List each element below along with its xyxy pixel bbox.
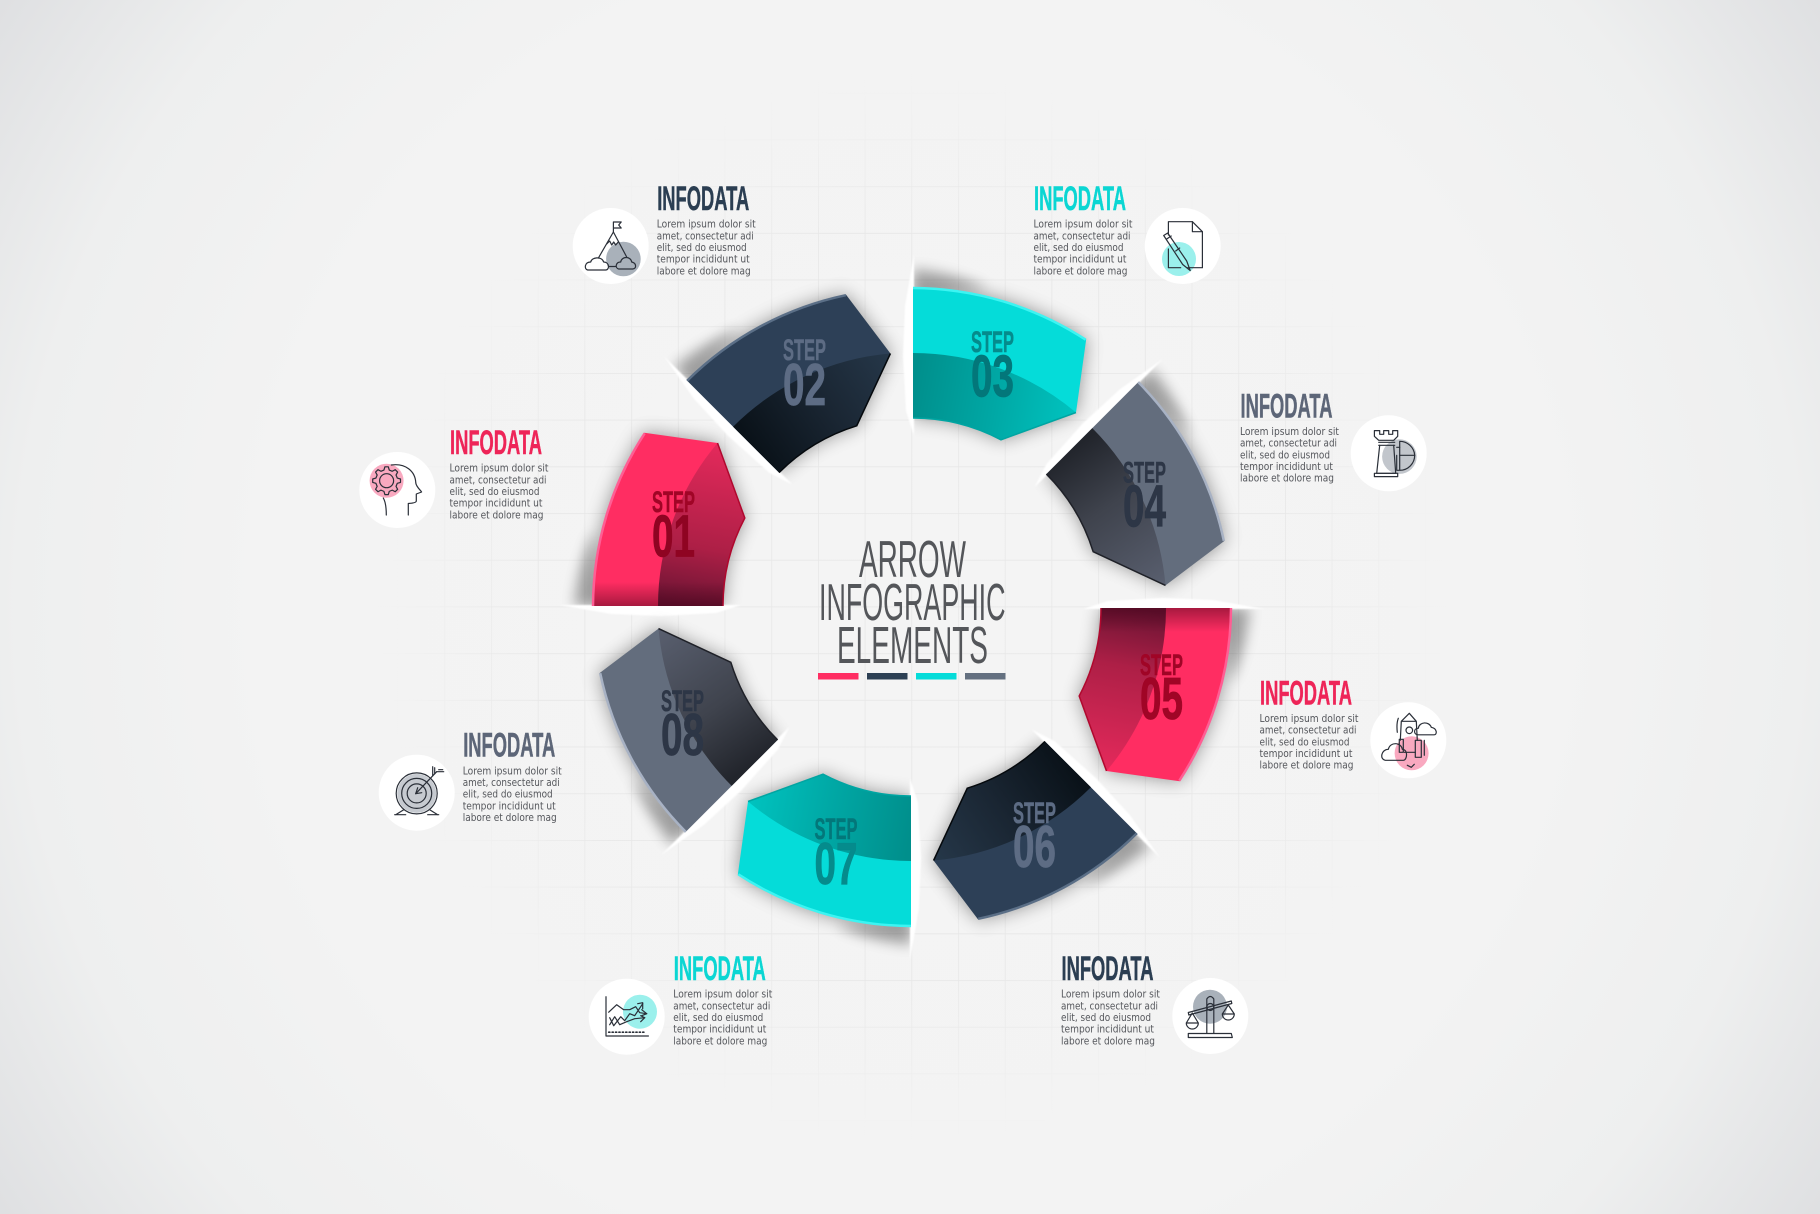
- text block: step 05 info: amet, consectetur adi: [1260, 725, 1356, 737]
- text block: step 07 info: [673, 950, 772, 1047]
- arrow segment: step 07: 07: [814, 831, 858, 897]
- text block: step 03 info: [1034, 180, 1132, 277]
- text block: step 08 info: INFODATA: [463, 727, 555, 765]
- icon: rocket and clouds: [1370, 702, 1446, 778]
- text block: step 07 info: tempor incididunt ut: [673, 1024, 766, 1036]
- icon: mountain with flag: [573, 208, 649, 284]
- text block: step 01 info: elit, sed do eiusmod: [450, 486, 540, 498]
- text block: step 08 info: [463, 727, 562, 824]
- text block: step 02 info: elit, sed do eiusmod: [657, 242, 747, 254]
- arrow segment: step 03: 03: [971, 344, 1014, 410]
- arrow segment: step 03: [903, 254, 1086, 440]
- text block: step 03 info: amet, consectetur adi: [1034, 230, 1130, 242]
- text block: step 08 info: labore et dolore mag: [463, 812, 557, 824]
- text block: step 01 info: Lorem ipsum dolor sit: [450, 463, 548, 475]
- text block: step 06 info: Lorem ipsum dolor sit: [1061, 989, 1160, 1001]
- title: ELEMENTS: [837, 617, 988, 675]
- text block: step 07 info: labore et dolore mag: [673, 1035, 767, 1047]
- text block: step 03 info: tempor incididunt ut: [1034, 254, 1126, 266]
- icon: chess rook with pie chart: [1351, 415, 1427, 491]
- text block: step 06 info: labore et dolore mag: [1061, 1035, 1155, 1047]
- text block: step 02 info: amet, consectetur adi: [657, 230, 754, 242]
- arrow segment: step 05: 05: [1140, 666, 1183, 732]
- arrow segment: step 02: 02: [783, 352, 826, 418]
- arrow segment: step 07: [738, 774, 921, 960]
- arrow segment: step 02: [670, 285, 899, 482]
- arrow segment: step 01: STEP: [652, 486, 695, 519]
- text block: step 05 info: labore et dolore mag: [1260, 760, 1354, 772]
- arrow segment: step 06: STEP: [1013, 797, 1056, 830]
- text block: step 02 info: INFODATA: [657, 180, 749, 218]
- title: ARROW: [859, 531, 966, 589]
- text block: step 05 info: elit, sed do eiusmod: [1260, 736, 1350, 748]
- text block: step 01 info: amet, consectetur adi: [450, 474, 546, 486]
- text block: step 04 info: elit, sed do eiusmod: [1240, 449, 1330, 461]
- text block: step 02 info: Lorem ipsum dolor sit: [657, 219, 756, 231]
- text block: step 08 info: tempor incididunt ut: [463, 800, 556, 812]
- text block: step 06 info: amet, consectetur adi: [1061, 1000, 1158, 1012]
- arrow segment: step 04: STEP: [1123, 456, 1166, 490]
- text block: step 04 info: [1240, 387, 1339, 485]
- text block: step 05 info: tempor incididunt ut: [1260, 748, 1352, 760]
- icon: chart with arrows: [589, 979, 665, 1055]
- text block: step 04 info: tempor incididunt ut: [1240, 461, 1333, 473]
- text block: step 07 info: elit, sed do eiusmod: [673, 1012, 763, 1024]
- arrow segment: step 04: [1038, 366, 1234, 594]
- icon: target with arrow: [379, 755, 455, 831]
- arrow segment: step 07: STEP: [814, 813, 858, 846]
- text block: step 07 info: Lorem ipsum dolor sit: [673, 989, 772, 1001]
- title: [819, 531, 1006, 675]
- arrow segment: step 06: [925, 733, 1154, 929]
- text block: step 04 info: amet, consectetur adi: [1240, 438, 1337, 450]
- text block: step 01 info: tempor incididunt ut: [450, 498, 542, 510]
- text block: step 03 info: labore et dolore mag: [1034, 265, 1128, 277]
- icon: document with pen: [1145, 208, 1221, 284]
- arrow segment: step 06: 06: [1013, 814, 1056, 880]
- text block: step 05 info: INFODATA: [1260, 674, 1352, 712]
- text block: step 02 info: labore et dolore mag: [657, 265, 751, 277]
- text block: step 06 info: [1061, 950, 1160, 1047]
- text block: step 01 info: [450, 424, 548, 521]
- text block: step 08 info: elit, sed do eiusmod: [463, 789, 553, 801]
- icon: balance scales: [1172, 978, 1248, 1054]
- title: INFOGRAPHIC: [819, 574, 1006, 632]
- text block: step 03 info: elit, sed do eiusmod: [1034, 242, 1124, 254]
- arrow segment: step 01: [559, 433, 745, 616]
- text block: step 05 info: Lorem ipsum dolor sit: [1260, 713, 1358, 725]
- text block: step 07 info: amet, consectetur adi: [673, 1000, 770, 1012]
- arrow segment: step 02: STEP: [783, 334, 826, 367]
- arrow segment: step 05: STEP: [1140, 649, 1183, 682]
- arrow segment: step 08: 08: [661, 702, 704, 768]
- text block: step 04 info: Lorem ipsum dolor sit: [1240, 426, 1339, 438]
- text block: step 04 info: INFODATA: [1240, 387, 1332, 425]
- text block: step 01 info: INFODATA: [450, 424, 542, 462]
- arrow segment: step 08: [590, 620, 786, 848]
- text block: step 06 info: INFODATA: [1062, 950, 1154, 988]
- text block: step 01 info: labore et dolore mag: [450, 509, 544, 521]
- colour bars under title: [818, 673, 1006, 680]
- text block: step 08 info: Lorem ipsum dolor sit: [463, 765, 562, 777]
- text block: step 02 info: tempor incididunt ut: [657, 254, 750, 266]
- text block: step 05 info: [1260, 674, 1358, 772]
- arrow segment: step 08: STEP: [661, 685, 704, 718]
- text block: step 03 info: INFODATA: [1034, 180, 1126, 218]
- text block: step 06 info: tempor incididunt ut: [1061, 1024, 1154, 1036]
- arrow segment: step 04: 04: [1123, 474, 1166, 540]
- text block: step 04 info: labore et dolore mag: [1240, 473, 1334, 485]
- text block: step 07 info: INFODATA: [674, 950, 766, 988]
- text block: step 06 info: elit, sed do eiusmod: [1061, 1012, 1151, 1024]
- text block: step 08 info: amet, consectetur adi: [463, 777, 560, 789]
- icon: head with gear: [359, 452, 435, 528]
- text block: step 03 info: Lorem ipsum dolor sit: [1034, 219, 1132, 231]
- arrow segment: step 05: [1079, 598, 1265, 781]
- arrow segment: step 03: STEP: [971, 326, 1014, 359]
- arrow segment: step 01: 01: [652, 504, 695, 570]
- text block: step 02 info: [657, 180, 756, 277]
